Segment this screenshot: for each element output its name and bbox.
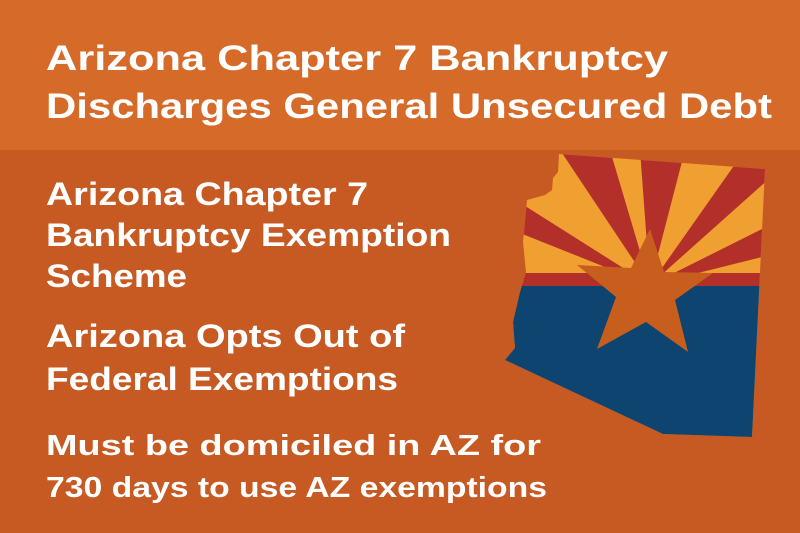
text block: domicile requirement: 730 days to use AZ exemptions [46,472,547,504]
text block: opts out: Federal Exemptions [46,361,398,397]
text block: exemption scheme [46,176,451,294]
title: Discharges General Unsecured Debt [46,87,772,126]
text block: exemption scheme: Scheme [46,258,187,294]
text block: domicile requirement [46,430,547,504]
header band [0,0,800,150]
text block: exemption scheme: Arizona Chapter 7 [46,176,368,212]
icon: Arizona state flag map [505,154,765,437]
icon: star [577,229,713,352]
title [46,39,772,126]
title: Arizona Chapter 7 Bankruptcy [46,39,669,78]
text block: domicile requirement: Must be domiciled in AZ for [46,430,541,462]
text block: opts out [46,318,405,397]
text block: opts out: Arizona Opts Out of [46,318,405,354]
text block: exemption scheme: Bankruptcy Exemption [46,217,451,253]
